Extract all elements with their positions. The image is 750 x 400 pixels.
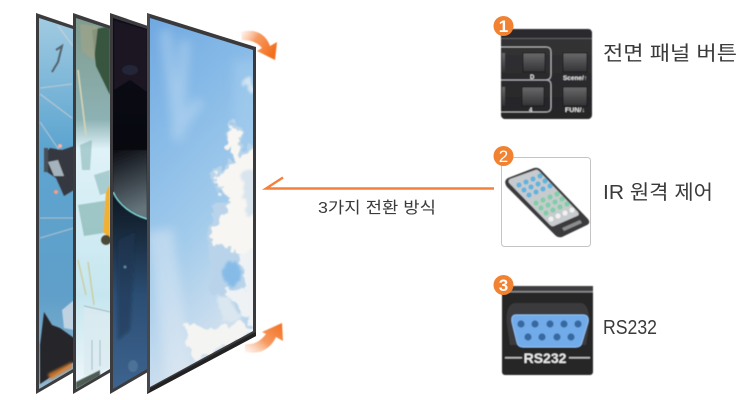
arrow: control to screens [266,178,494,188]
badge 1 [494,16,514,36]
badge 3: 3 [499,276,508,295]
icon: bottom rotation arrow [245,323,283,353]
label: RS232: RS232 [603,317,657,339]
image: front panel: Scene/↑ [563,76,587,82]
clouds [184,76,258,360]
screen 3: planet in space [110,13,149,394]
item 1: front panel buttons [494,16,737,119]
screen 1: space battle [36,13,75,394]
badge 3 [494,275,514,295]
icon: top rotation arrow [241,31,277,60]
image: front panel: FUN/↓ [565,108,585,114]
screen 4: sky with clouds [147,13,260,394]
screen stack [36,13,260,394]
image: front panel: 4 [529,108,533,114]
image: RS232 port: RS232 [524,350,567,366]
image: front panel: D [530,75,535,81]
image: remote control [502,158,590,246]
badge 2: 2 [499,147,508,166]
label: three switching methods: 3가지 전환 방식 [318,199,436,217]
image: front panel [501,29,592,119]
image: RS232 port [502,286,593,375]
screen 2: jungle city [73,13,112,394]
label: front panel buttons: 전면 패널 버튼 [603,42,737,65]
badge 2 [494,146,514,166]
item 3: RS232 [494,275,657,375]
badge 1: 1 [499,17,508,36]
item 2: IR remote [494,146,713,246]
label: IR remote control: IR 원격 제어 [603,181,713,204]
